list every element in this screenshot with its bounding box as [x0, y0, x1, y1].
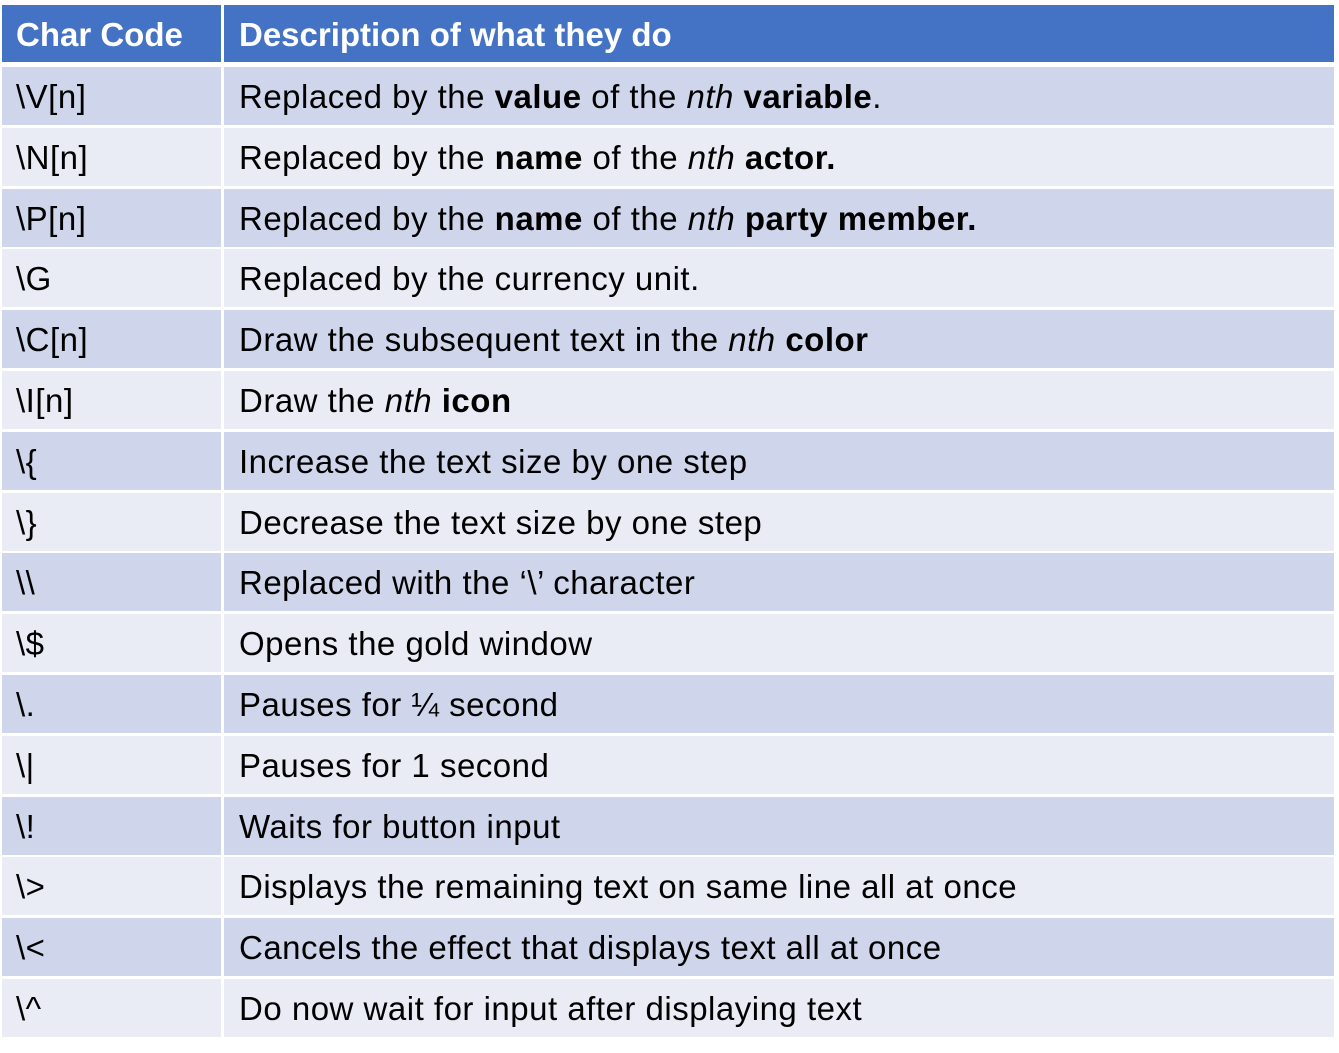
row: \C[n]: nth: [728, 321, 776, 358]
row: \P[n]: Replaced by the of the: [239, 200, 678, 237]
row: \C[n]: Draw the subsequent text in the: [239, 321, 719, 358]
row: \!: [2, 797, 1334, 855]
row: \<: \<: [16, 929, 45, 966]
row: \^: [2, 979, 1334, 1037]
row: \^: \^: [16, 990, 42, 1027]
row: \G: Replaced by the currency unit.: [239, 260, 700, 297]
row: \{: [2, 432, 1334, 490]
row: \>: \>: [16, 868, 45, 905]
row: \I[n]: nth: [385, 382, 432, 419]
row: \I[n]: \I[n]: [16, 382, 74, 419]
header row: Description of what they do: [239, 16, 672, 52]
row: \|: \|: [16, 747, 35, 784]
row: \C[n]: [2, 310, 1334, 368]
row: \|: [2, 736, 1334, 794]
row: \}: [2, 493, 1334, 551]
row: \N[n]: actor.: [745, 139, 836, 176]
row: \<: [2, 918, 1334, 976]
row: \V[n]: nth: [686, 78, 734, 115]
row: \^: Do now wait for input after displaying text: [239, 990, 862, 1027]
row: \\: [2, 553, 1334, 611]
row: \{: \{: [16, 443, 37, 480]
row: \.: [2, 675, 1334, 733]
row: \\: \\: [16, 564, 35, 601]
row: \C[n]: color: [785, 321, 869, 358]
row: \I[n]: icon: [442, 382, 512, 419]
row: \N[n]: nth: [688, 139, 735, 176]
row: \P[n]: nth: [688, 200, 735, 237]
row: \N[n]: name: [495, 139, 583, 176]
row: \V[n]: \V[n]: [16, 78, 86, 115]
row: \}: Decrease the text size by one step: [239, 504, 762, 541]
row: \!: \!: [16, 808, 35, 845]
row: \I[n]: [2, 371, 1334, 429]
row: \P[n]: name: [495, 200, 583, 237]
row: \.: \.: [16, 686, 35, 723]
row: \|: Pauses for 1 second: [239, 747, 549, 784]
row: \!: Waits for button input: [239, 808, 561, 845]
row: \V[n]: Replaced by the of the .: [239, 78, 882, 115]
row: \G: [2, 249, 1334, 307]
row: \P[n]: party member.: [745, 200, 977, 237]
row: \}: \}: [16, 504, 37, 541]
row: \P[n]: \P[n]: [16, 200, 86, 237]
row: \\: Replaced with the ‘\’ character: [239, 564, 695, 601]
row: \V[n]: [2, 67, 1334, 125]
row: \<: Cancels the effect that displays text all at once: [239, 929, 942, 966]
row: \{: Increase the text size by one step: [239, 443, 748, 480]
row: \G: \G: [16, 260, 52, 297]
row: \$: [2, 614, 1334, 672]
row: \$: \$: [16, 625, 45, 662]
header row: [2, 5, 1334, 62]
row: \>: Displays the remaining text on same line all at once: [239, 868, 1017, 905]
row: \$: Opens the gold window: [239, 625, 593, 662]
row: \V[n]: variable: [744, 78, 872, 115]
row: \N[n]: [2, 128, 1334, 186]
row: \V[n]: value: [495, 78, 582, 115]
row: \I[n]: Draw the: [239, 382, 375, 419]
row: \>: [2, 857, 1334, 915]
row: \P[n]: [2, 189, 1334, 247]
row: \N[n]: \N[n]: [16, 139, 88, 176]
header row: Char Code: [16, 16, 183, 52]
row: \N[n]: Replaced by the of the: [239, 139, 678, 176]
row: \.: Pauses for ¼ second: [239, 686, 559, 723]
row: \C[n]: \C[n]: [16, 321, 88, 358]
